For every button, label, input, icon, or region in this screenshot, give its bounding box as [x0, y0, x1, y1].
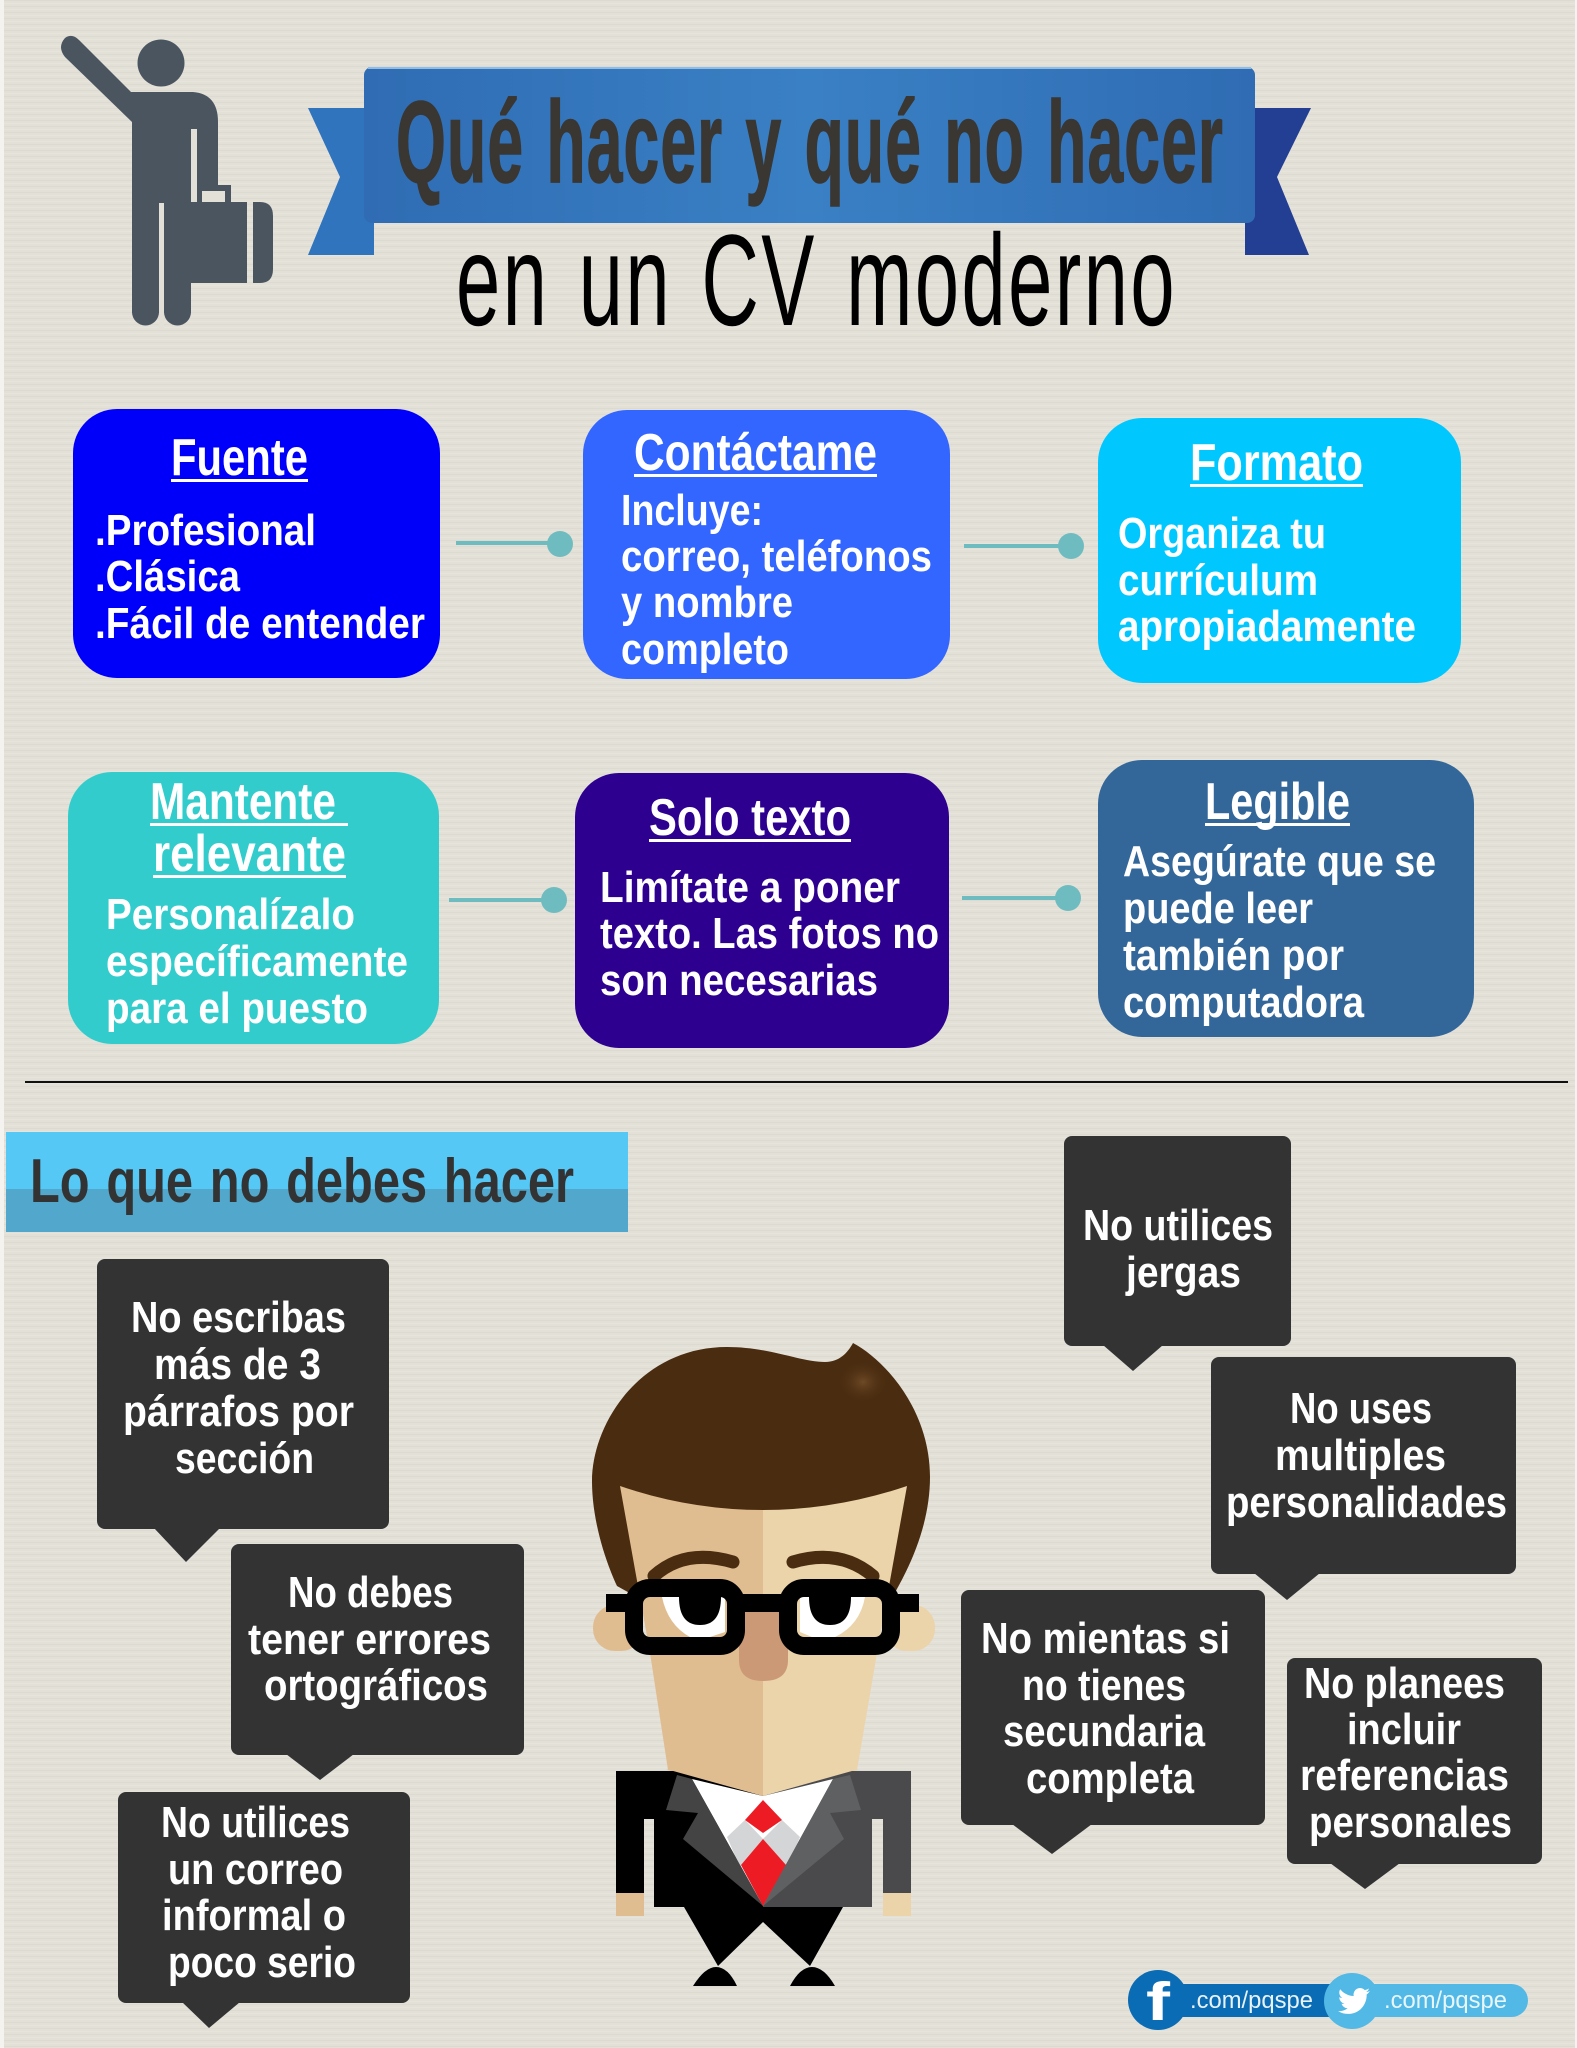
icon: person with briefcase — [61, 36, 273, 328]
panel: Fuente — [73, 409, 440, 678]
nose — [739, 1610, 788, 1681]
chin — [666, 1769, 859, 1796]
text: Formato body: apropiadamente — [1118, 602, 1416, 651]
lapels — [666, 1775, 861, 1906]
text: Legible body: Asegúrate que se — [1123, 837, 1436, 886]
ears — [593, 1605, 935, 1651]
callout: párrafos: No escribas — [131, 1293, 346, 1342]
connector — [962, 885, 1081, 911]
text: Fuente body: .Profesional — [95, 506, 316, 555]
social: Twitter: .com/pqspe — [1384, 1987, 1507, 2014]
callout: referencias: No planees — [1304, 1659, 1505, 1708]
heading: Solo texto: Solo texto — [649, 789, 851, 847]
heading: Contáctame: Contáctame — [634, 424, 877, 482]
callout: correo: un correo — [168, 1845, 343, 1894]
text: Formato body — [1118, 509, 1416, 651]
text: Contáctame body: Incluye: — [621, 486, 763, 535]
callout: secundaria: No mientas si — [981, 1614, 1230, 1663]
callout: referencias: personales — [1309, 1798, 1512, 1847]
text: Mantente body: para el puesto — [106, 984, 368, 1033]
text: Solo texto body: son necesarias — [600, 956, 878, 1005]
connector — [964, 533, 1084, 559]
eyebrows — [654, 1557, 873, 1576]
hands — [616, 1893, 911, 1916]
text: Formato body: Organiza tu — [1118, 509, 1326, 558]
section banner: Lo que no debes hacer: Lo que no debes hacer — [30, 1147, 574, 1216]
eyes — [662, 1597, 865, 1637]
callout: errores — [231, 1544, 524, 1780]
callout: jergas: jergas — [1125, 1248, 1241, 1297]
callout: correo: informal o — [162, 1891, 346, 1940]
panel: Legible — [1098, 760, 1474, 1037]
callout: secundaria: secundaria — [1003, 1707, 1205, 1756]
callout: correo — [118, 1792, 410, 2028]
shoes — [693, 1967, 835, 1986]
panel: Solo texto — [575, 773, 949, 1048]
callout: jergas — [1064, 1136, 1291, 1371]
callout: personalidades: multiples — [1275, 1431, 1446, 1480]
connector — [456, 531, 573, 557]
heading: Mantente relevante: Mantente — [150, 773, 336, 831]
text: Contáctame body: y nombre — [621, 578, 793, 627]
glasses — [606, 1588, 919, 1646]
heading: Mantente relevante — [150, 773, 348, 883]
callout: referencias — [1287, 1658, 1542, 1889]
callout: párrafos: párrafos por — [123, 1387, 354, 1436]
social: Twitter — [1324, 1973, 1528, 2029]
social: Facebook: f — [1146, 1972, 1171, 2032]
heading: Fuente: Fuente — [171, 429, 308, 487]
text: Contáctame body — [621, 486, 932, 674]
illustration: man with glasses — [592, 1343, 935, 1986]
text: Fuente body: .Fácil de entender — [95, 599, 425, 648]
callout: párrafos — [97, 1259, 389, 1562]
callout: jergas: No utilices — [1083, 1201, 1273, 1250]
callout: personalidades: No uses — [1290, 1384, 1432, 1433]
panel: Mantente relevante — [68, 772, 439, 1044]
text: Legible body: también por — [1123, 931, 1344, 980]
hair — [592, 1343, 930, 1596]
text: Mantente body: Personalízalo — [106, 890, 355, 939]
text: Fuente body: .Clásica — [95, 552, 240, 601]
text: Contáctame body: correo, teléfonos — [621, 532, 932, 581]
face — [620, 1486, 907, 1796]
legs — [684, 1907, 843, 1966]
callout: correo: No utilices — [161, 1798, 350, 1847]
social: Facebook — [1128, 1970, 1347, 2032]
callout: errores: ortográficos — [264, 1661, 488, 1710]
text: Solo texto body — [600, 863, 939, 1005]
text: Contáctame body: completo — [621, 625, 789, 674]
callout: secundaria: completa — [1026, 1754, 1194, 1803]
text: Legible body: computadora — [1123, 978, 1364, 1027]
text: Fuente body — [95, 506, 425, 648]
connector — [449, 887, 567, 913]
callout: referencias: incluir — [1347, 1705, 1461, 1754]
heading: Formato: Formato — [1190, 434, 1363, 492]
heading: Mantente relevante: relevante — [153, 825, 346, 883]
section banner: Lo que no debes hacer — [6, 1132, 628, 1232]
text: Mantente body: específicamente — [106, 937, 408, 986]
text: Mantente body — [106, 890, 408, 1033]
callout: errores: No debes — [288, 1568, 453, 1617]
callout: personalidades: personalidades — [1226, 1478, 1507, 1527]
callout: párrafos: más de 3 — [154, 1340, 321, 1389]
text: Solo texto body: texto. Las fotos no — [600, 909, 939, 958]
callout: secundaria — [961, 1590, 1265, 1854]
shirt — [692, 1779, 833, 1906]
text: Solo texto body: Limítate a poner — [600, 863, 900, 912]
callout: personalidades — [1211, 1357, 1516, 1600]
callout: párrafos: sección — [175, 1434, 314, 1483]
panel: Contáctame — [583, 410, 950, 679]
text: Legible body — [1123, 837, 1436, 1027]
panel: Formato — [1098, 418, 1461, 683]
callout: referencias: referencias — [1300, 1751, 1509, 1800]
social: Facebook: .com/pqspe — [1190, 1987, 1313, 2014]
callout: secundaria: no tienes — [1022, 1661, 1186, 1710]
tie — [727, 1800, 800, 1906]
jacket — [616, 1771, 911, 1907]
title ribbon — [308, 67, 1311, 255]
callout: errores: tener errores — [248, 1615, 491, 1664]
text: Formato body: currículum — [1118, 556, 1318, 605]
callout: correo: poco serio — [168, 1938, 356, 1987]
heading: Legible: Legible — [1205, 773, 1350, 831]
text: Legible body: puede leer — [1123, 884, 1313, 933]
